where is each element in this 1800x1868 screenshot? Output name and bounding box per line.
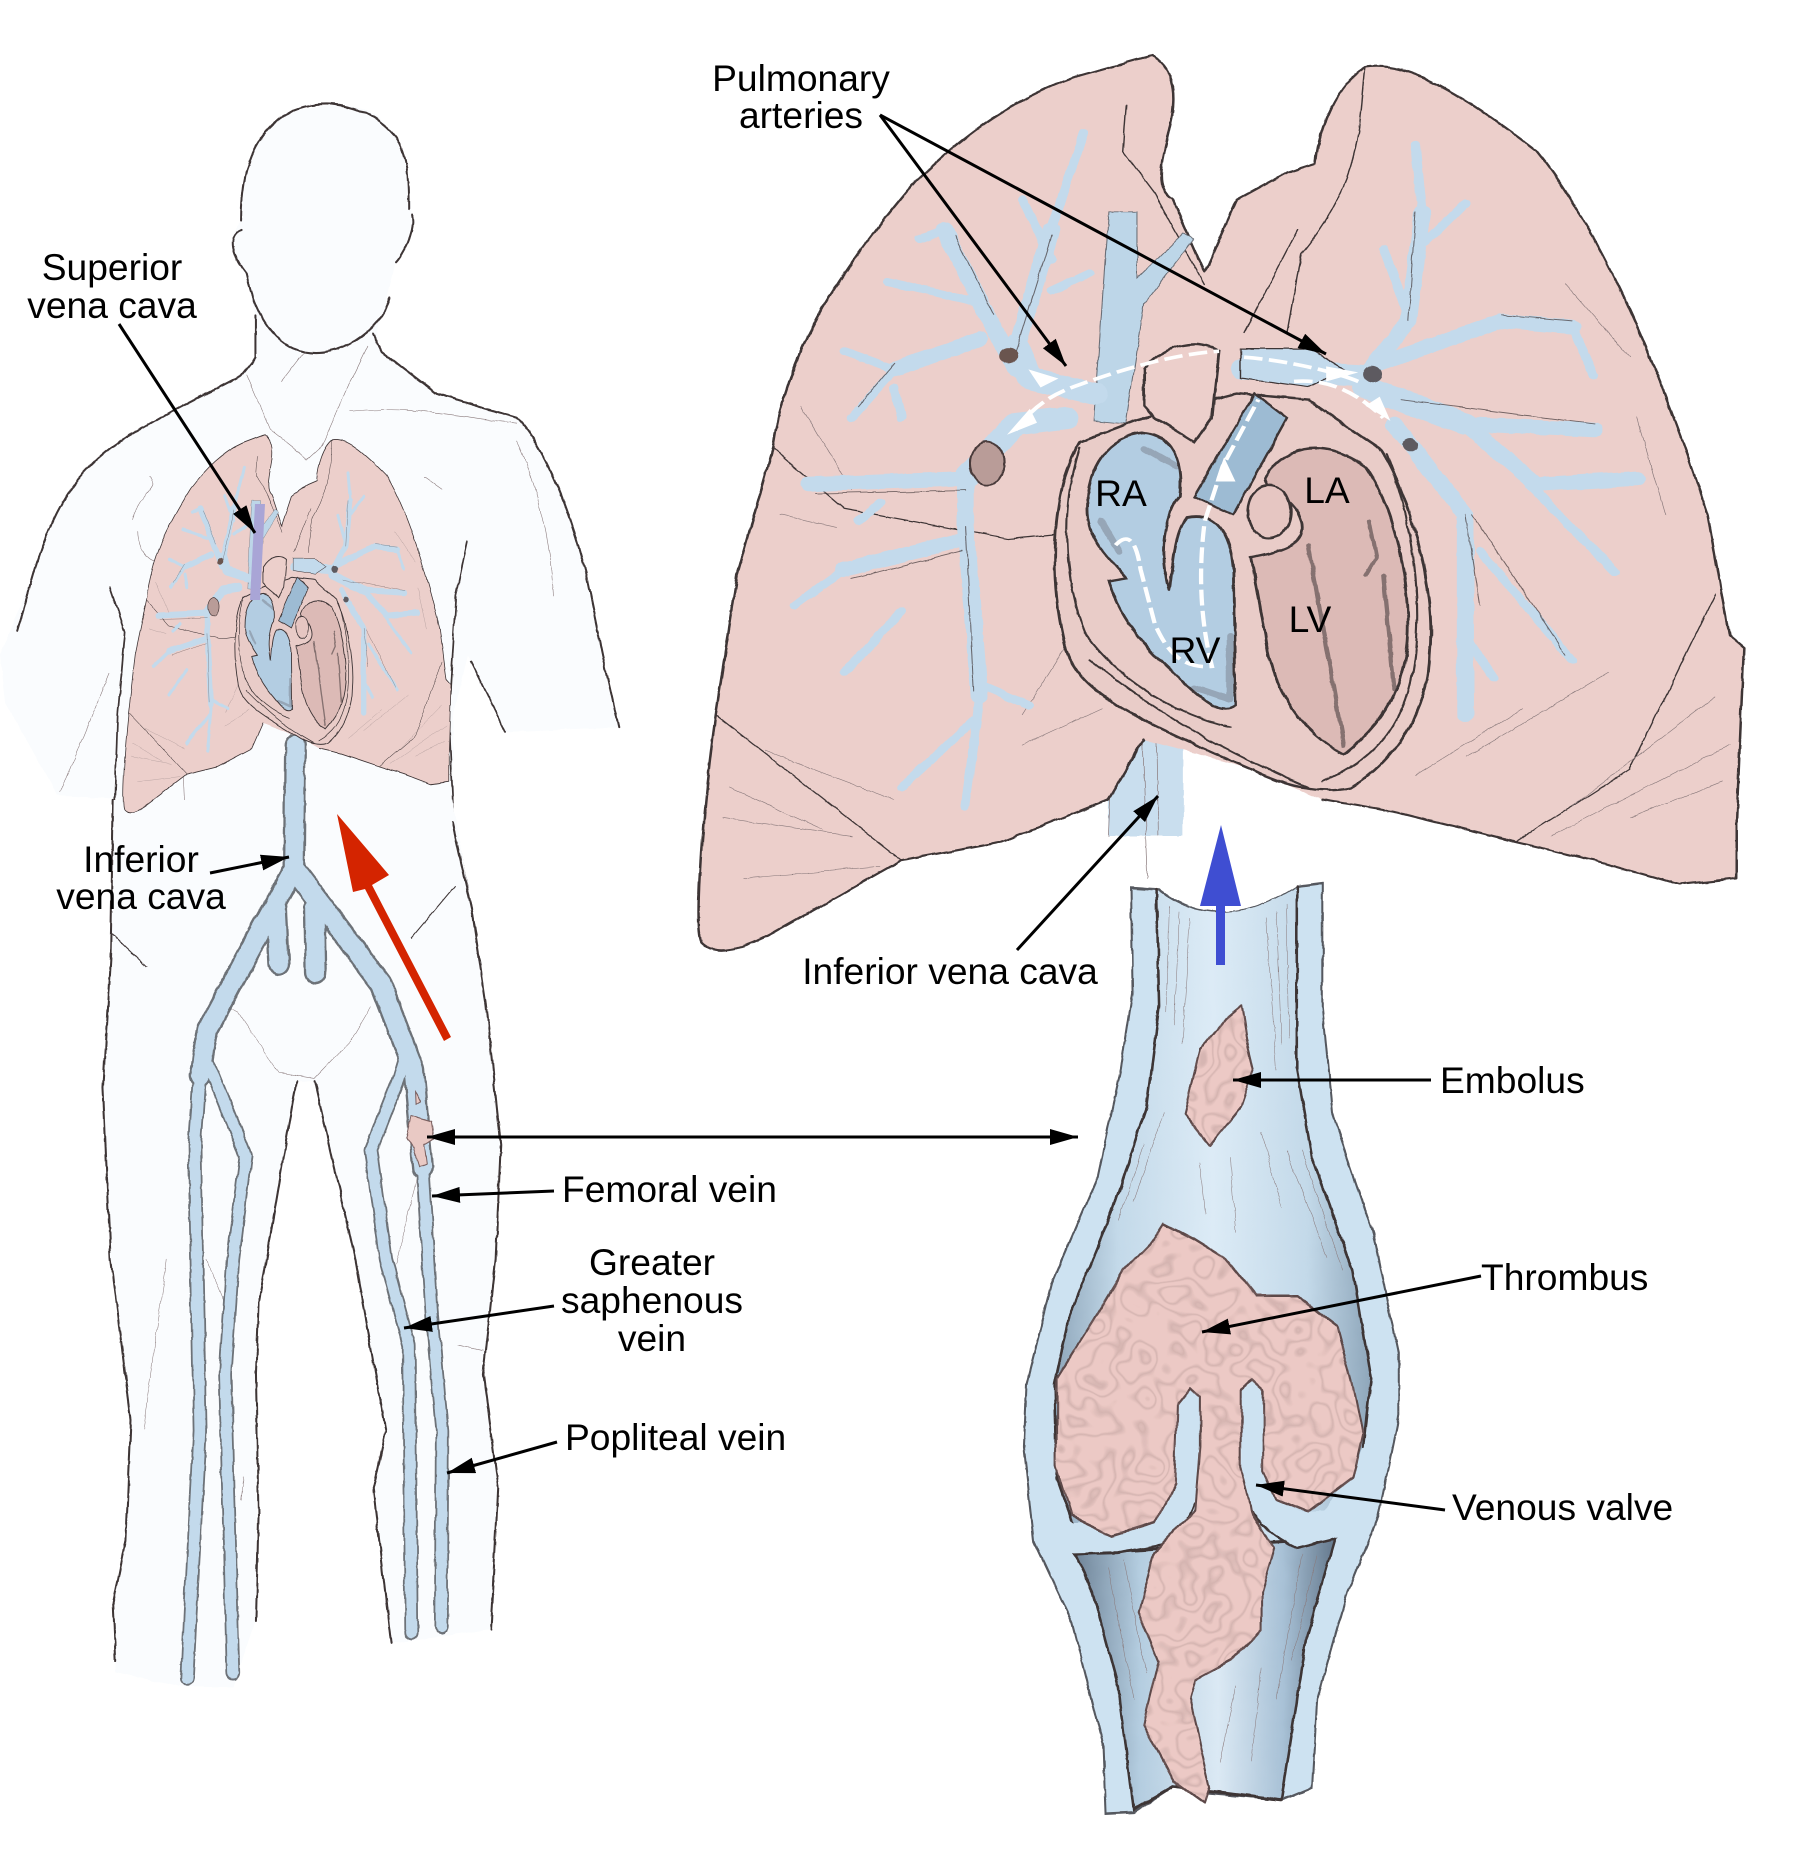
upper lumen shading (1055, 886, 1371, 1523)
heart chamber labels: RV (1170, 629, 1221, 671)
superior vena cava (1094, 212, 1194, 424)
label: Inferior vena cava (body) (56, 838, 289, 917)
label: Superior vena cava (27, 246, 255, 533)
label: Venous valve (1256, 1485, 1673, 1528)
label: Femoral vein (432, 1168, 777, 1210)
right valve cusp (1241, 1381, 1366, 1548)
pulmonary artery branches, right lung (1244, 145, 1637, 715)
veins of the body (187, 745, 442, 1678)
label: Pulmonary arteries (712, 57, 1326, 366)
lower lumen hatching (1108, 1554, 1317, 1762)
left atrium and ventricle (1248, 449, 1408, 754)
red flow arrow (337, 814, 451, 1041)
label: Inferior vena cava (body): vena cava (56, 875, 226, 917)
inferior vena cava, iliac, femoral and popliteal veins (187, 745, 442, 1678)
double-headed arrow linking leg to vein section (427, 1136, 1078, 1138)
label: Popliteal vein (447, 1416, 786, 1473)
label: Pulmonary arteries: Pulmonary (712, 57, 890, 99)
heart chamber labels: RA (1095, 472, 1147, 514)
label: Greater saphenous vein: vein (618, 1317, 686, 1359)
label: Inferior vena cava (lungs) (802, 796, 1158, 992)
superior vena cava in body (250, 504, 265, 600)
pulmonary trunk (1194, 394, 1287, 515)
mini lungs and heart inside body (123, 435, 451, 812)
embolus (1185, 1006, 1253, 1145)
label: Femoral vein: Femoral vein (562, 1168, 777, 1210)
heart chamber labels (1095, 469, 1350, 671)
label: Pulmonary arteries: arteries (739, 94, 863, 136)
valve undersides (1075, 1504, 1335, 1554)
small thrombus in leg vein (406, 1093, 434, 1167)
label: Popliteal vein: Popliteal vein (565, 1416, 786, 1458)
label: Venous valve: Venous valve (1452, 1486, 1673, 1528)
heart wall (1055, 394, 1431, 790)
thrombus (1057, 1223, 1363, 1803)
white dashed blood-flow path (1007, 351, 1390, 667)
upper lumen (1055, 886, 1371, 1523)
lower lumen (1075, 1538, 1335, 1809)
blue flow arrow (1200, 825, 1241, 965)
panel: lungs and heart (699, 55, 1744, 950)
right atrium and ventricle (1087, 433, 1235, 709)
body upper silhouette (0, 104, 619, 935)
blood clots in pulmonary arteries (970, 348, 1418, 485)
left valve cusp (1055, 1387, 1201, 1554)
inferior vena cava behind lungs (1108, 727, 1183, 878)
label: Inferior vena cava (body): Inferior (83, 838, 199, 880)
lung outlines (699, 55, 1744, 950)
pencil hatching (1118, 905, 1343, 1271)
aortic arch (1144, 344, 1219, 442)
label: Inferior vena cava (lungs): Inferior vena cava (802, 950, 1098, 992)
vein wall (1024, 883, 1399, 1814)
label: Greater saphenous vein: saphenous (561, 1279, 743, 1321)
label: Thrombus (1202, 1256, 1648, 1332)
panel: vein cross-section (1024, 883, 1399, 1814)
pulmonary artery branches, left lung (794, 133, 1094, 806)
heart inner contour (1067, 448, 1417, 788)
label: Superior vena cava: vena cava (27, 284, 197, 326)
panel: human body with venous system (0, 104, 619, 1687)
body lower silhouette (103, 800, 501, 1687)
label: Superior vena cava: Superior (42, 246, 182, 288)
label: Thrombus: Thrombus (1481, 1256, 1648, 1298)
label: Greater saphenous vein (404, 1241, 743, 1359)
label: Greater saphenous vein: Greater (589, 1241, 715, 1283)
heart chamber labels: LA (1304, 469, 1350, 511)
pulmonary artery trunk bridge (1240, 348, 1344, 388)
label: Embolus: Embolus (1440, 1059, 1585, 1101)
heart chamber labels: LV (1289, 598, 1332, 640)
